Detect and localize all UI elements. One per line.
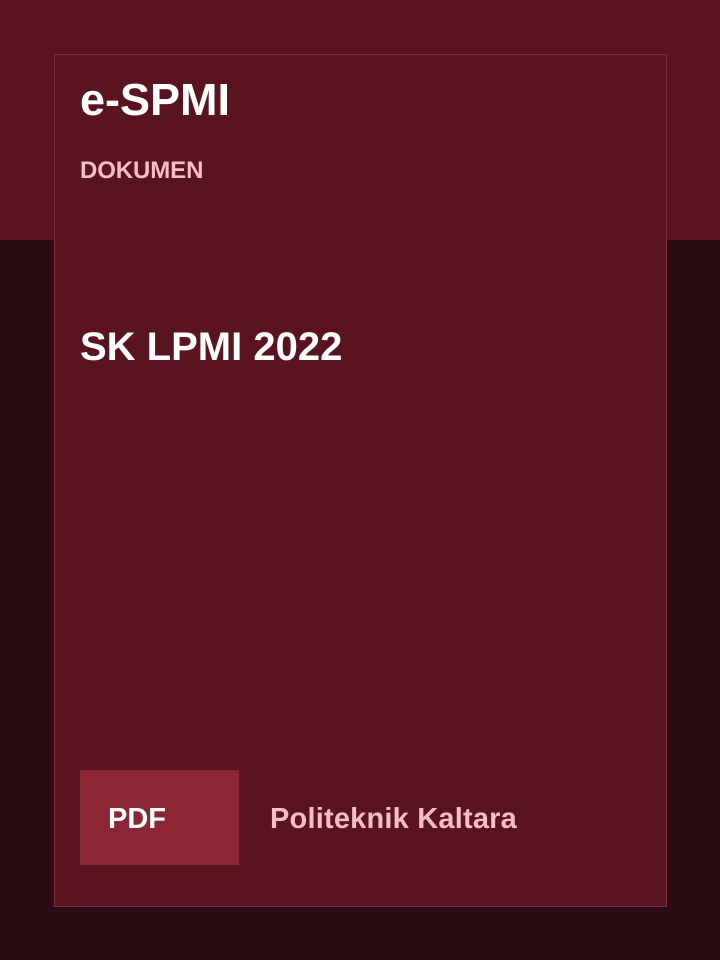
document name heading: SK LPMI 2022 [80, 325, 342, 369]
category label: DOKUMEN [80, 157, 203, 184]
institution name: Politeknik Kaltara [270, 803, 517, 835]
top background band [0, 0, 720, 240]
panel: document card [54, 54, 667, 907]
badge text: PDF [108, 803, 166, 835]
title: e-SPMI [80, 74, 230, 125]
badge: PDF [80, 770, 239, 865]
